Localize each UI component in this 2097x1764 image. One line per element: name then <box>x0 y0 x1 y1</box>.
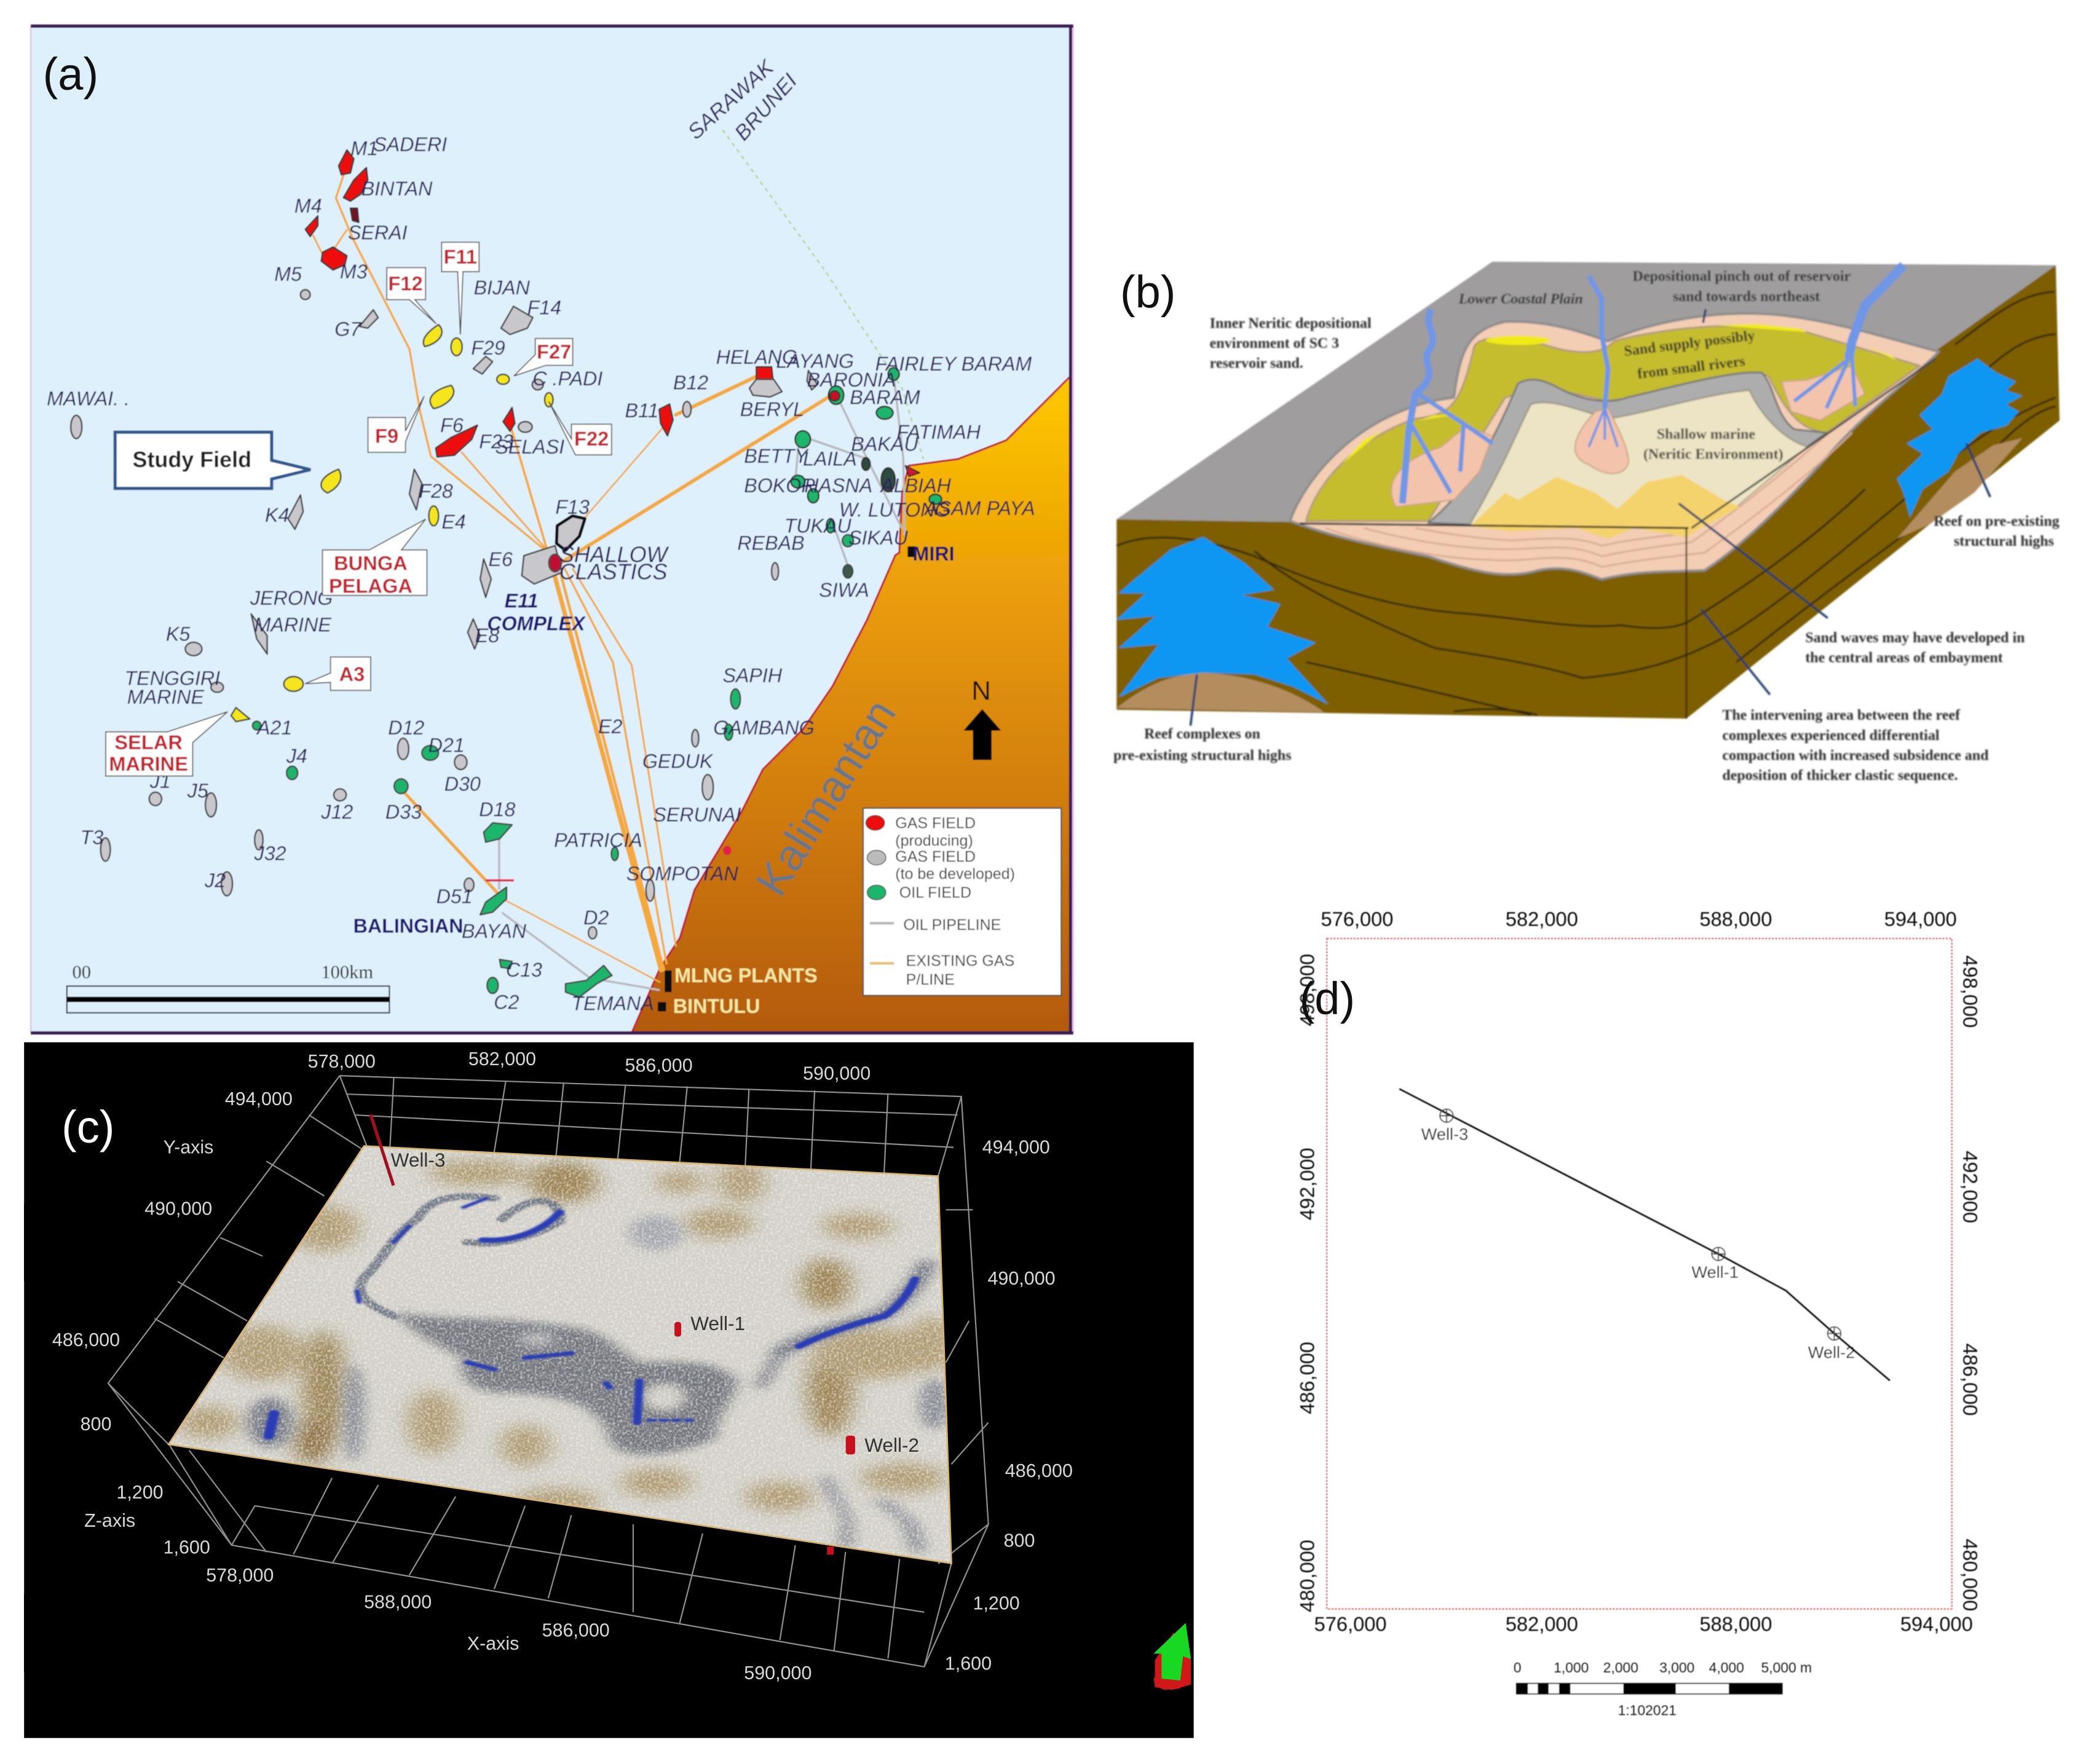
map field labels: MARINE <box>255 614 331 636</box>
well labels: Well-2 <box>1808 1342 1855 1361</box>
block diagram annotations <box>1113 269 2059 784</box>
block diagram annotations: deposition of thicker clastic sequence. <box>1723 768 1958 784</box>
map coordinate labels: 582,000 <box>1506 907 1578 930</box>
well 2 marker <box>846 1436 855 1454</box>
3D grid <box>108 1076 989 1667</box>
well 3 symbol <box>1440 1109 1453 1122</box>
callout: Study Field <box>115 432 310 489</box>
map coordinate labels: 498,000 <box>1296 954 1319 1026</box>
map coordinate labels: 594,000 <box>1900 1613 1973 1636</box>
map field labels: GAMBANG <box>713 717 815 739</box>
map field labels: FATIMAH <box>896 421 981 443</box>
map coordinate labels: 492,000 <box>1959 1151 1981 1223</box>
block diagram annotations: Sand waves may have developed in <box>1805 630 2025 646</box>
map coordinate labels: 486,000 <box>1959 1344 1981 1416</box>
map field labels: SELASI <box>495 436 564 458</box>
map frame <box>31 25 1073 1033</box>
panel a: offshore Sarawak field map <box>31 25 1073 1033</box>
map field labels: REBAB <box>737 532 805 554</box>
map field labels <box>47 55 1035 1017</box>
block diagram annotations: environment of SC 3 <box>1210 336 1339 352</box>
map field labels: E2 <box>598 715 622 738</box>
slice edge <box>168 1146 952 1564</box>
field callout boxes: MARINE <box>109 752 188 775</box>
panel letter c: (c) <box>61 1101 114 1152</box>
axis labels: 1,200 <box>973 1593 1020 1614</box>
axis labels <box>52 1049 1073 1683</box>
map field labels: BINTAN <box>361 178 433 200</box>
scale bar: 5,000 m <box>1761 1660 1812 1675</box>
axis labels: 590,000 <box>803 1063 871 1084</box>
map field labels: BETTY <box>744 445 810 467</box>
block diagram annotations: Lower Coastal Plain <box>1458 291 1583 307</box>
map field labels: TENGGIRI <box>124 667 220 690</box>
map field labels: SARAWAK <box>683 55 779 144</box>
legend: P/LINE <box>906 971 955 988</box>
map field labels: D18 <box>479 798 515 821</box>
map field labels: W. LUTONG <box>839 498 950 521</box>
panel letter a: (a) <box>43 49 98 100</box>
map field labels: BERYL <box>740 398 804 420</box>
undeveloped gas fields (grey) <box>71 289 818 551</box>
reef mound right <box>1897 438 2023 538</box>
scale bar: 4,000 <box>1709 1660 1744 1675</box>
scale bar: 1:102021 <box>1618 1703 1676 1719</box>
map field labels: F14 <box>527 297 561 319</box>
brown strata lines <box>1116 292 2056 715</box>
block diagram annotations: from small rivers <box>1637 353 1746 382</box>
block diagram annotations: pre-existing structural highs <box>1113 747 1292 763</box>
field callout boxes: BUNGA <box>334 551 408 574</box>
map field labels: TEMANA <box>571 993 654 1015</box>
panel letter d: (d) <box>1300 973 1355 1024</box>
map coordinate labels: 480,000 <box>1959 1538 1981 1611</box>
field callout boxes: PELAGA <box>329 574 413 597</box>
well 1 label: Well-1 <box>690 1312 745 1334</box>
sand waves <box>1470 475 1740 538</box>
map field labels: M5 <box>274 263 302 285</box>
block diagram annotations: sand towards northeast <box>1673 289 1820 305</box>
map field labels: SIWA <box>819 579 869 601</box>
panel letter b: (b) <box>1120 267 1175 318</box>
thin grey lineaments <box>360 1197 560 1316</box>
reef mound left <box>1116 673 1324 712</box>
axis labels: 1,600 <box>945 1653 992 1674</box>
brown amplitude patches <box>178 1160 954 1514</box>
well markers <box>371 1114 919 1554</box>
well 1 symbol <box>1712 1247 1725 1261</box>
axis labels: 494,000 <box>225 1089 293 1109</box>
legend: OIL FIELD <box>899 884 971 902</box>
map coordinate labels: 582,000 <box>1506 1613 1578 1636</box>
map coordinate labels: 480,000 <box>1296 1540 1319 1612</box>
block diagram shapes <box>1116 262 2059 726</box>
axis labels: 800 <box>81 1414 111 1435</box>
map field labels: M4 <box>294 195 322 217</box>
axis labels: 578,000 <box>308 1051 376 1072</box>
field callout boxes: F9 <box>375 425 398 447</box>
map coordinate labels: 588,000 <box>1699 1613 1772 1636</box>
axis labels: 586,000 <box>625 1055 693 1076</box>
oil fields north-east (green) <box>791 368 942 533</box>
map field labels: K4 <box>265 504 289 526</box>
map field labels: SADERI <box>373 133 447 156</box>
scale bar: 3,000 <box>1659 1660 1694 1675</box>
texture noise <box>160 1137 963 1572</box>
map field labels: LAILA <box>803 448 857 470</box>
map field labels: M3 <box>340 261 368 283</box>
map coordinate labels: 588,000 <box>1699 907 1772 930</box>
map field labels: SERAI <box>348 222 408 244</box>
field callout boxes <box>106 242 612 776</box>
block diagram annotations: reservoir sand. <box>1210 356 1303 372</box>
legend: oil <box>867 885 886 900</box>
black background <box>24 1042 1194 1738</box>
legend: (to be developed) <box>895 865 1015 883</box>
axis labels: 582,000 <box>468 1049 536 1069</box>
map field labels: MLNG PLANTS <box>674 964 818 986</box>
legend: gas pipeline <box>870 963 894 964</box>
fields in the southern part of the map <box>101 535 916 1012</box>
axis labels: Z-axis <box>84 1510 135 1531</box>
map field labels: BARONIA <box>807 369 896 391</box>
map field labels: E4 <box>441 511 466 533</box>
map field labels: TUKAU <box>784 514 851 537</box>
block diagram annotations: Depositional pinch out of reservoir <box>1633 269 1851 285</box>
rivers <box>1402 266 1903 503</box>
map field labels: SERUNAI <box>653 804 741 826</box>
study and discovery fields (yellow) <box>321 325 553 526</box>
well 3 trajectory <box>371 1114 393 1186</box>
oil pipelines <box>499 377 904 990</box>
map field labels: FAIRLEY BARAM <box>875 353 1032 375</box>
map field labels: MAWAI. . <box>47 388 130 410</box>
panel d: well location base map <box>1296 907 1981 1719</box>
scale bar: 100km <box>321 961 373 982</box>
field callout boxes: A3 <box>339 663 365 685</box>
well 2 symbol <box>1828 1327 1841 1340</box>
block diagram annotations: Reef on pre-existing <box>1933 514 2059 530</box>
map field labels: BALINGIAN <box>353 915 464 937</box>
field callout boxes: F11 <box>444 245 477 268</box>
map field labels: ASAM PAYA <box>923 497 1035 519</box>
legend: producing gas <box>866 816 885 830</box>
map field labels: F28 <box>419 480 453 502</box>
reef right blue <box>1897 359 2023 518</box>
boundary mark: red dash near D51 <box>486 880 514 881</box>
axis labels: 590,000 <box>744 1663 812 1683</box>
map coordinate labels: 486,000 <box>1296 1342 1319 1414</box>
cream shallow marine <box>1470 390 1807 528</box>
map field labels: SOMPOTAN <box>626 862 738 884</box>
map field labels: D30 <box>444 773 481 795</box>
map field labels: G7 <box>334 318 361 340</box>
map field labels: A21 <box>256 717 292 739</box>
well labels <box>1421 1125 1855 1361</box>
well labels: Well-1 <box>1691 1262 1739 1282</box>
map field labels: J1 <box>149 770 171 792</box>
map field labels: C .PADI <box>532 368 602 390</box>
map field labels: J32 <box>254 843 286 865</box>
map coordinate labels: 594,000 <box>1884 907 1957 930</box>
producing gas fields (red) <box>306 150 773 457</box>
map field labels: C13 <box>506 959 542 981</box>
map field labels: D12 <box>388 717 424 739</box>
map field labels: J12 <box>320 801 353 823</box>
boundary: Sarawak Brunei dotted line <box>722 130 923 459</box>
axis labels: X-axis <box>467 1633 519 1654</box>
map field labels: BARAM <box>850 386 920 408</box>
deltas <box>1391 366 1865 507</box>
map frame <box>1327 939 1952 1609</box>
field callout boxes: SELAR <box>114 731 183 754</box>
legend: oil pipeline <box>870 923 894 924</box>
well labels: Well-3 <box>1421 1125 1468 1144</box>
map field labels: HELANG <box>716 346 797 368</box>
axis labels: 588,000 <box>364 1592 432 1613</box>
field callout boxes: F12 <box>388 272 423 294</box>
map field labels: D21 <box>428 734 465 756</box>
map field labels: JERONG <box>250 587 333 609</box>
map sea background <box>31 25 1073 1033</box>
map field labels: D2 <box>583 907 609 929</box>
top surface <box>1116 262 2056 528</box>
axis labels: 486,000 <box>1005 1460 1073 1481</box>
legend: EXISTING GAS <box>906 953 1014 970</box>
yellow sand slivers <box>1341 324 1897 465</box>
legend: undeveloped gas <box>867 850 886 865</box>
well 2 label: Well-2 <box>864 1434 919 1456</box>
map field labels: J5 <box>187 779 208 801</box>
map field labels: GEDUK <box>642 750 714 773</box>
well at edge <box>827 1546 834 1554</box>
icon: north arrow: N <box>971 677 991 706</box>
section strata curves <box>1325 429 1852 567</box>
seismic line <box>1399 1089 1890 1380</box>
map field labels: F6 <box>440 414 464 436</box>
scale bar <box>67 961 389 1013</box>
map field labels: D33 <box>385 801 422 823</box>
block diagram annotations: Reef complexes on <box>1144 726 1260 742</box>
axis labels: 800 <box>1004 1530 1035 1551</box>
block diagram annotations: Inner Neritic depositional <box>1210 315 1372 331</box>
axis labels: Y-axis <box>164 1136 213 1157</box>
well 1 marker <box>674 1322 681 1337</box>
legend <box>863 808 1061 996</box>
scale bar: 1,000 <box>1554 1660 1589 1675</box>
map field labels: HASNA <box>804 474 872 497</box>
map field labels: MARINE <box>127 686 205 708</box>
map field labels: SAPIH <box>722 664 783 687</box>
axis labels: 578,000 <box>206 1565 274 1586</box>
axis labels: 490,000 <box>144 1199 212 1219</box>
map field labels: J2 <box>204 869 226 891</box>
legend: (producing) <box>895 832 973 849</box>
blue strong-amplitude streaks <box>269 1199 915 1436</box>
scale bar: 2,000 <box>1603 1660 1638 1675</box>
map field labels: ALBIAH <box>879 474 952 497</box>
axis labels: 490,000 <box>987 1268 1056 1289</box>
map coordinate labels: 576,000 <box>1314 1613 1387 1636</box>
land: Kalimantan coast <box>631 377 1070 1033</box>
right channel fairway <box>760 1266 926 1385</box>
map coordinate labels: 498,000 <box>1959 955 1981 1028</box>
block diagram annotations: Shallow marine <box>1657 427 1755 443</box>
map field labels: D51 <box>436 885 473 907</box>
label: Kalimantan: Kalimantan <box>747 691 906 904</box>
map field labels: BINTULU <box>673 995 760 1017</box>
map field labels: MIRI <box>913 543 955 565</box>
panel b: depositional block diagram <box>1113 262 2059 784</box>
map field labels: T3 <box>81 827 103 849</box>
axis labels: 1,600 <box>164 1537 210 1557</box>
legend: GAS FIELD <box>895 848 976 865</box>
map field labels: F13 <box>555 496 590 518</box>
map field labels: J4 <box>286 745 307 767</box>
grey shoreline band <box>1428 372 1826 524</box>
map coordinate labels <box>1296 907 1981 1636</box>
map field labels: BIJAN <box>474 277 531 299</box>
block body <box>1116 266 2059 719</box>
map field labels: SIKAU <box>848 527 908 549</box>
olive coastal plain <box>1306 326 1919 521</box>
icon: north arrow <box>963 677 1001 760</box>
block diagram annotations: the central areas of embayment <box>1805 650 2003 666</box>
scale bar <box>1514 1660 1812 1719</box>
map coordinate labels: 492,000 <box>1296 1148 1319 1220</box>
axis labels: 586,000 <box>542 1620 610 1640</box>
scale bar: 0 <box>1514 1660 1522 1675</box>
map field labels: BAYAN <box>462 920 527 942</box>
gas pipelines <box>313 174 832 982</box>
map field labels: B11 <box>625 400 658 422</box>
callout: Study Field: Study Field <box>133 447 251 472</box>
map field labels: BAKAU <box>851 433 918 455</box>
map field labels: CLASTICS <box>559 559 668 585</box>
panel c: 3D seismic attribute slice <box>24 1042 1194 1738</box>
map field labels: F23 <box>479 430 513 452</box>
icon: green orientation arrow <box>1153 1623 1191 1690</box>
map field labels: E6 <box>489 548 513 570</box>
block diagram annotations: (Neritic Environment) <box>1643 447 1783 463</box>
reef left blue <box>1116 537 1329 704</box>
map field labels: M1 <box>350 138 378 160</box>
map field labels: E8 <box>475 624 499 647</box>
block diagram annotations: The intervening area between the reef <box>1723 707 1961 723</box>
field callout boxes: F27 <box>537 340 571 363</box>
grey channel patches <box>247 1215 950 1552</box>
legend: GAS FIELD <box>895 814 976 832</box>
map field labels: C2 <box>494 991 519 1013</box>
axis labels: 1,200 <box>116 1482 164 1503</box>
block diagram annotations: compaction with increased subsidence and <box>1723 747 1989 763</box>
map field labels: E11 <box>505 589 539 612</box>
map field labels: K5 <box>166 623 190 645</box>
map field labels: BOKOR <box>744 474 816 497</box>
map field labels: SHALLOW <box>559 541 669 567</box>
well 3 label: Well-3 <box>391 1149 445 1171</box>
pointer lines <box>1190 309 1990 726</box>
seismic slice <box>160 1137 963 1572</box>
map coordinate labels: 576,000 <box>1321 907 1393 930</box>
map field labels: F29 <box>471 337 505 359</box>
coastal pink rim and section <box>1290 313 1939 579</box>
map field labels: PATRICIA <box>554 829 642 851</box>
map field labels: LAYANG <box>776 350 854 372</box>
axis labels: 494,000 <box>982 1136 1050 1157</box>
legend: OIL PIPELINE <box>903 916 1001 934</box>
map field labels: BRUNEI <box>730 69 802 145</box>
map field labels: COMPLEX <box>487 612 586 634</box>
axis labels: 486,000 <box>52 1329 120 1350</box>
block diagram annotations: structural highs <box>1954 534 2054 549</box>
field callout boxes: F22 <box>574 427 609 450</box>
block diagram annotations: complexes experienced differential <box>1723 728 1940 744</box>
block diagram annotations: Sand supply possibly <box>1623 328 1756 360</box>
map field labels: B12 <box>673 372 708 394</box>
scale bar: 00 <box>73 961 91 982</box>
